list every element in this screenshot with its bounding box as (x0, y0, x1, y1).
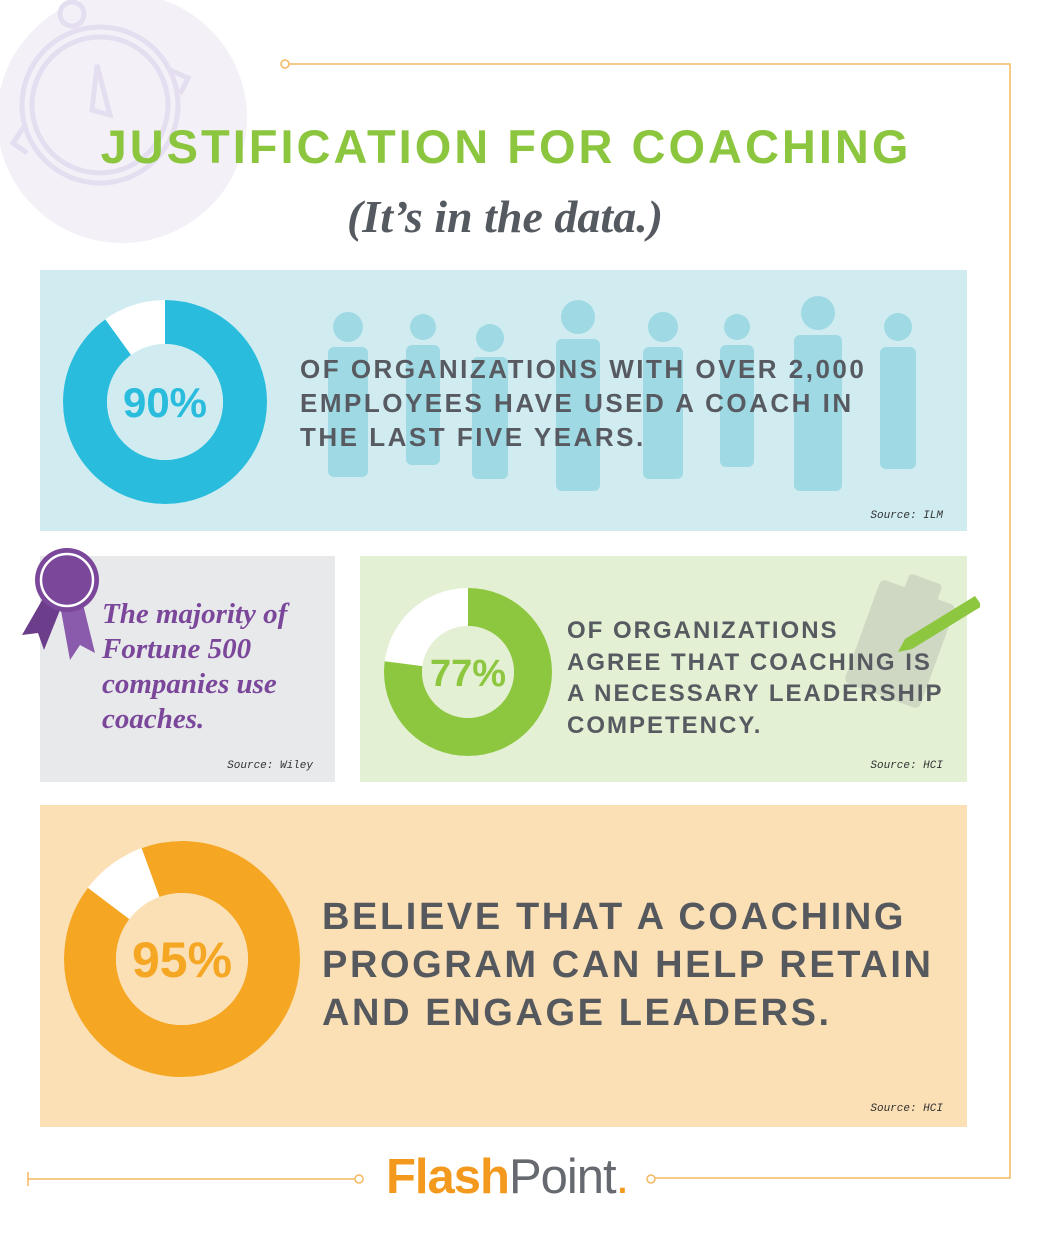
icon: clipboard and pencil (845, 574, 980, 708)
stat text (567, 617, 944, 738)
donut chart 95%: 95% (132, 932, 232, 988)
quote text: companies use (102, 668, 277, 700)
stat text: OF ORGANIZATIONS WITH OVER 2,000 (300, 354, 866, 384)
logo: FlashPoint: FlashPoint. (386, 1150, 628, 1204)
panel: 95% (40, 805, 967, 1127)
stat text: AND ENGAGE LEADERS. (322, 992, 832, 1034)
stat text (322, 896, 934, 1034)
title: JUSTIFICATION FOR COACHING (101, 120, 911, 173)
quote text: The majority of (102, 598, 287, 630)
stat text: BELIEVE THAT A COACHING (322, 896, 906, 938)
stat text: A NECESSARY LEADERSHIP (567, 680, 944, 707)
quote text: Fortune 500 (102, 633, 251, 665)
stat text: EMPLOYEES HAVE USED A COACH IN (300, 388, 854, 418)
stat text: THE LAST FIVE YEARS. (300, 422, 646, 452)
donut chart 77% (384, 588, 552, 756)
panel: 90% (40, 270, 967, 531)
subtitle: (It’s in the data.) (347, 191, 663, 242)
stat text: COMPETENCY. (567, 712, 762, 738)
panel: 77% (360, 556, 967, 782)
icon: ribbon award (22, 548, 99, 660)
source: Source: Wiley (227, 760, 313, 772)
source: Source: HCI (870, 760, 943, 772)
donut chart 77%: 77% (430, 653, 506, 695)
panel: Fortune 500 (40, 556, 335, 782)
donut chart 90% (63, 300, 267, 504)
decorative compass circle (0, 0, 247, 243)
stat text (300, 354, 866, 452)
quote text: coaches. (102, 703, 204, 735)
source: Source: ILM (870, 510, 943, 522)
stat text: PROGRAM CAN HELP RETAIN (322, 944, 934, 986)
source: Source: HCI (870, 1103, 943, 1115)
stat text: AGREE THAT COACHING IS (567, 648, 932, 676)
quote text (102, 598, 290, 735)
donut chart 95% (64, 841, 300, 1077)
icon: people silhouettes (328, 296, 916, 491)
donut chart 90%: 90% (123, 379, 207, 426)
stat text: OF ORGANIZATIONS (567, 617, 839, 644)
